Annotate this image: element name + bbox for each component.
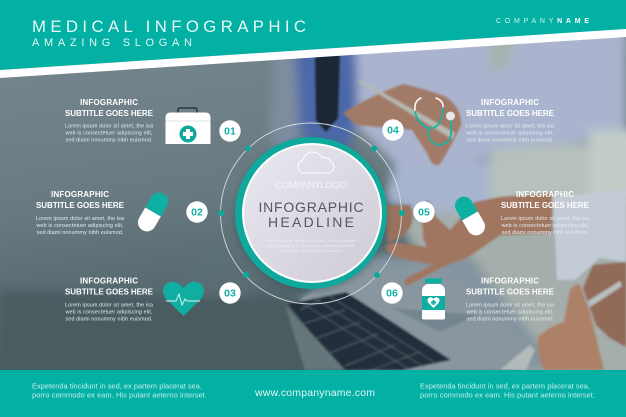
table [395,200,626,380]
number 06 [381,282,403,304]
item 04 text: web is consectetuer adipiscing elit, [466,130,554,136]
hub body text: adipiscing elit, sed diam nonummy nibh [268,244,354,248]
item 03 text [64,276,154,322]
item 01 text: SUBTITLE GOES HERE [65,109,154,118]
footer band [0,370,626,417]
hand center [386,193,552,286]
paper [553,190,626,280]
number 03: 03 [224,288,236,300]
footer text right [420,382,595,400]
icon: first aid kit [166,108,210,144]
white disc [242,143,382,283]
hand with pen [343,84,461,165]
icon: capsule [135,189,171,235]
number 05: 05 [418,207,430,219]
item 05 text: web is consectetuer adipiscing elit, [500,223,589,229]
website: www.companyname.com [254,387,375,399]
number 01 [219,120,241,142]
orbit ring [220,123,402,304]
item 06 text: sed diami nonummy nibh euismod. [466,316,554,322]
item 06 text: web is consectetuer adipiscing elit, [466,310,554,316]
laptop [300,266,534,370]
number 04: 04 [387,125,399,137]
slogan: AMAZING SLOGAN [32,37,192,49]
item 06 text [466,276,555,322]
footer text left: Expetenda tincidunt in sed, ex partem placerat sea, [32,382,202,390]
item 03 text: INFOGRAPHIC [80,276,138,286]
item 05 text: sed diami nonummy nibh euismod. [502,230,588,236]
item 01 text [64,98,154,144]
headline: INFOGRAPHIC [258,199,364,215]
footer text left: porro commodo ex eam. His putant aeterno interset. [32,390,207,400]
headline [258,199,364,230]
item 02 text [36,190,125,236]
tie [315,52,340,132]
hands bottom right [583,262,626,347]
number 06: 06 [386,288,398,300]
number 01: 01 [224,126,236,138]
item 04 text: INFOGRAPHIC [481,98,539,107]
teal ring [235,137,387,289]
item 06 text: INFOGRAPHIC [481,276,539,286]
hub body text: Lorem ipsum dolor sit amet, consectetuer [266,239,357,243]
company name: COMPANY NAME [496,18,589,25]
item 05 text: Lorem ipsum dolor sit amet, the isa [501,216,589,222]
item 06 text: SUBTITLE GOES HERE [466,288,555,296]
item 03 text: web is consectetuer adipiscing elit, [64,310,153,316]
soft fold shading [90,210,300,370]
item 05 text: INFOGRAPHIC [516,190,574,199]
footer text right: porro commodo ex eam. His putant aeterno interset. [420,390,595,400]
title: MEDICAL INFOGRAPHIC [32,17,306,36]
central hub [218,123,405,304]
icon: cloud [298,152,334,173]
item 01 text: sed diami nonummy nibh euismod. [66,138,152,144]
footer text left [32,382,207,400]
number 02 [186,201,208,223]
item 06 text: Lorem ipsum dolor sit amet, the isa [466,302,554,308]
item 01 text: INFOGRAPHIC [80,98,138,107]
item 02 text: sed diami nonummy nibh euismod. [36,230,124,236]
hub body text: euismod tincidunt ut laoreet [280,249,342,253]
item 01 text: web is consectetuer adipiscing elit, [64,130,153,136]
icon: heart pulse [163,282,204,316]
item 04 text [466,98,555,144]
item 02 text: Lorem ipsum dolor sit amet, the isa [36,216,124,222]
number 03 [219,282,241,304]
item 04 text: SUBTITLE GOES HERE [466,109,555,118]
item 05 text: SUBTITLE GOES HERE [501,201,590,210]
logo text: COMPANYLOGO [275,180,347,191]
hub body text [266,239,357,253]
item 05 text [500,190,590,236]
header band [0,0,626,70]
footer text right: Expetenda tincidunt in sed, ex partem placerat sea, [420,382,590,390]
shirts and coat [350,20,626,165]
white stripe [0,29,626,78]
item 01 text: Lorem ipsum dolor sit amet, the isa [65,124,153,130]
item 04 text: Lorem ipsum dolor sit amet, the isa [466,124,554,130]
icon: stethoscope [415,98,455,145]
number 05 [413,201,435,223]
icon: capsule [452,193,488,239]
item 02 text: SUBTITLE GOES HERE [36,201,125,210]
item 02 text: INFOGRAPHIC [51,190,109,199]
keyboard [288,292,451,370]
item 04 text: sed diami nonummy nibh euismod. [466,138,554,144]
item 03 text: Lorem ipsum dolor sit amet, the isa [65,302,153,308]
headline: HEADLINE [268,214,354,230]
item 02 text: web is consectetuer adipiscing elit, [36,223,124,229]
number 04 [382,119,404,141]
item 03 text: sed diami nonummy nibh euismod. [66,316,152,322]
icon: medicine bottle [422,278,445,320]
orbit dots [218,146,405,278]
number 02: 02 [191,207,203,219]
item 03 text: SUBTITLE GOES HERE [65,288,154,296]
